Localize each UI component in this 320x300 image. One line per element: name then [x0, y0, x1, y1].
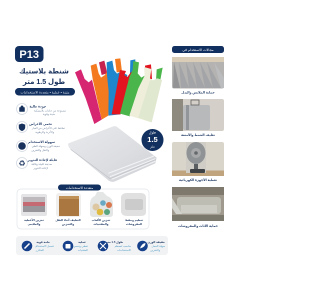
benefit: strong material: المتكرر: [35, 248, 44, 252]
photo: suitcase cover: [172, 99, 224, 137]
use: clothes and blankets: والملابس: [28, 222, 41, 226]
feature: protection: والأتربة والرطوبة: [35, 130, 55, 134]
use: clothes and blankets: [21, 194, 47, 226]
use: furnishings: [121, 193, 146, 226]
benefit: strong material: تتحمل الاستخدام: [35, 245, 54, 249]
title: طول 1.5 متر: [22, 79, 66, 86]
feature: ease of use: والنقل والتخزين: [31, 149, 50, 152]
feature: protection: تحمي الأغراض: [29, 122, 52, 126]
product code badge: P13: [19, 49, 39, 61]
panel: multiple uses: [17, 184, 149, 229]
use: toys: والمقتنيات: [94, 222, 109, 226]
feature: ease of use: [16, 140, 60, 152]
use: cartons: التغليف أثناء النقل: [55, 218, 81, 222]
feature: quality: مصنوعة من خامات بلاستيكية: [34, 108, 67, 112]
subtitle pill: متينة • عملية • متعددة الاستخدامات: [21, 90, 70, 94]
title: [19, 68, 69, 86]
bottom features strip: [16, 236, 168, 255]
benefit: lightweight: والتخزين: [150, 249, 161, 252]
length badge: [142, 129, 164, 151]
photo: fan cover: تغطية الأجهزة الكهربائية: [179, 178, 217, 182]
right column heading pill: مجالات الاستخدام في: [182, 48, 214, 53]
photo: furniture cover: [172, 187, 224, 228]
use: furnishings: تنظيم وحفظ: [125, 218, 143, 222]
feature: ease of use: سهولة الاستخدام: [28, 140, 55, 144]
use: clothes and blankets: تخزين الأغطية: [24, 218, 44, 222]
benefit: length: الاستخدامات: [117, 249, 131, 252]
benefit: length: مناسب لمعظم: [115, 245, 132, 248]
subtitle pill: [15, 88, 75, 96]
photo: garment cover: [172, 57, 224, 96]
length badge: متر: [149, 144, 155, 148]
benefit: length: طول 1.5 متر: [105, 240, 123, 244]
feature: recyclable: لإعادة التدوير: [32, 167, 48, 171]
use: toys: تخزين الألعاب: [92, 218, 110, 222]
panel header: متعددة الاستخدامات: [66, 186, 93, 190]
colored plastic bags: [75, 58, 163, 124]
benefit: strong material: خامة قوية: [36, 240, 50, 244]
feature: quality: جودة عالية: [29, 104, 46, 108]
feature: recyclable: صديقة للبيئة وقابلة: [31, 163, 53, 166]
benefit: length: [98, 240, 132, 252]
product code badge: [15, 46, 44, 62]
benefit: practical: عملية: [78, 240, 86, 244]
title: شنطة بلاستيك: [19, 68, 69, 76]
feature: quality: [16, 104, 67, 116]
feature: protection: تحافظ على الأغراض من الغبار: [31, 126, 65, 130]
right column heading pill: [172, 46, 224, 53]
length badge: طول: [149, 130, 156, 134]
photo: furniture cover: حماية الأثاث والمفروشات: [178, 224, 218, 228]
folded plastic sheet: [68, 126, 157, 182]
feature: ease of use: خفيفة الوزن وسهلة الطي: [32, 145, 60, 148]
use: toys: [90, 192, 113, 226]
feature: protection: [16, 122, 65, 134]
benefit: strong material: [22, 240, 54, 252]
feature: recyclable: قابلة لإعادة التدوير: [27, 158, 57, 163]
photo: suitcase cover: تغليف الشنط والأمتعة: [181, 133, 215, 137]
benefit: lightweight: سهلة الحمل: [152, 245, 166, 248]
use: cartons: والتخزين: [62, 222, 74, 226]
use: cartons: [55, 193, 81, 226]
use: furnishings: المفروشات: [126, 222, 142, 226]
benefit: lightweight: [137, 240, 166, 252]
benefit: practical: [63, 240, 88, 252]
feature: recyclable: ♻: [18, 159, 26, 168]
photo: garment cover: حماية الملابس والبدل: [181, 90, 215, 96]
benefit: practical: المقتنيات: [78, 249, 88, 252]
photo: fan cover: [172, 142, 224, 182]
feature: recyclable: [16, 158, 57, 171]
benefit: practical: تغطي وتحمي: [73, 245, 88, 248]
length badge: 1.5: [147, 135, 158, 144]
feature: quality: متينة وقوية: [43, 113, 56, 116]
benefit: lightweight: خفيفة الوزن: [148, 240, 165, 244]
